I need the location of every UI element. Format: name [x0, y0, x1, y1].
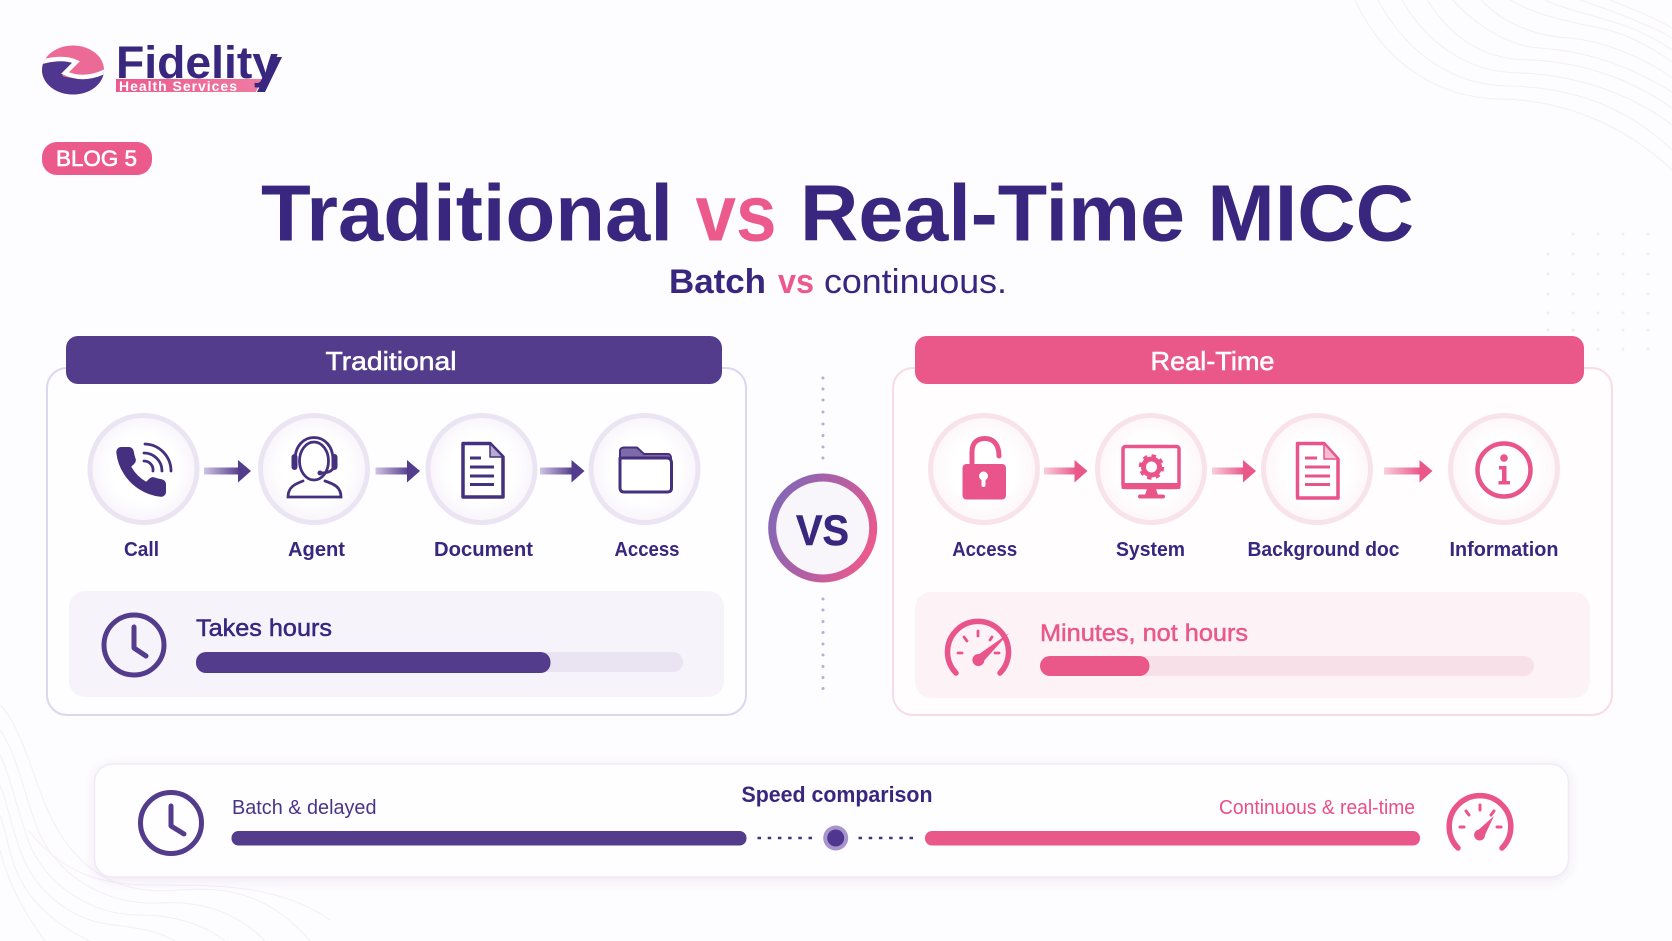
arrow: [376, 460, 420, 482]
duration card: takes hours: [69, 591, 724, 697]
title: vs: [696, 168, 776, 258]
panel: traditional: [47, 336, 746, 715]
logo wordmark: Fidelity: [116, 37, 278, 88]
step: agent: [260, 416, 368, 561]
arrow: [204, 460, 251, 482]
panel header: real-time: Real-Time: [1150, 346, 1274, 376]
title: [261, 168, 1414, 258]
panel header: traditional: Traditional: [326, 346, 456, 376]
step: call: Call: [124, 539, 159, 561]
title: Real-Time MICC: [800, 168, 1414, 258]
dotted line: bottom: [822, 598, 824, 690]
step: information: Information: [1450, 539, 1558, 561]
subtitle: Batch: [669, 263, 766, 301]
icon: clock: [140, 792, 202, 854]
step: document: Document: [434, 539, 533, 561]
logo: [42, 45, 282, 94]
logo tagline: Health Services: [119, 78, 237, 94]
icon: clock: [104, 615, 164, 675]
step: call: [90, 416, 197, 561]
arrow: [1044, 460, 1088, 482]
connector dots and node: [758, 826, 916, 850]
duration card: minutes not hours: [915, 592, 1590, 698]
step: background doc: [1248, 416, 1400, 561]
step: access lock: Access: [952, 539, 1017, 561]
panel: speed comparison: [94, 764, 1568, 877]
background waves: top right: [1355, 0, 1672, 170]
logo mark: [42, 46, 104, 94]
progress bar: [1040, 656, 1534, 676]
label: batch and delayed: Batch & delayed: [232, 797, 376, 819]
step: access folder: [591, 416, 698, 561]
vs badge: VS: [796, 507, 849, 555]
badge: blog 5: BLOG 5: [56, 146, 137, 171]
background waves: bottom left: [0, 705, 330, 941]
panel header: traditional: [66, 336, 722, 384]
subtitle: vs: [778, 263, 814, 301]
step: access lock: [930, 416, 1038, 561]
vs divider: [772, 376, 873, 690]
bar: real-time: [925, 831, 1420, 846]
badge: blog 5: [42, 142, 152, 175]
dotted line: top: [822, 376, 824, 460]
progress bar: [196, 652, 683, 673]
icon: speedometer: [1449, 796, 1511, 848]
subtitle: continuous.: [824, 263, 1007, 301]
subtitle: [669, 263, 1007, 301]
panel header: real-time: [915, 336, 1584, 384]
step: system: System: [1116, 539, 1185, 561]
background dots: [1546, 232, 1650, 350]
step: system: [1098, 416, 1204, 561]
step: access folder: Access: [614, 539, 680, 561]
arrow: [1384, 460, 1432, 482]
icon: speedometer: [948, 621, 1009, 673]
logo ribbon: [116, 79, 262, 92]
label: takes hours: Takes hours: [196, 615, 332, 642]
logo y tail: [257, 57, 282, 92]
step: background doc: Background doc: [1248, 539, 1400, 561]
step: document: [428, 416, 535, 561]
step: information: [1450, 416, 1558, 561]
step: agent: Agent: [288, 539, 345, 561]
vs badge: [772, 478, 873, 578]
label: continuous and real-time: Continuous & real-time: [1219, 797, 1415, 819]
arrow: [540, 460, 584, 482]
panel: real-time: [893, 336, 1612, 715]
heading: speed comparison: Speed comparison: [742, 782, 932, 807]
arrow: [1212, 460, 1256, 482]
bar: batch: [232, 831, 746, 846]
label: minutes not hours: Minutes, not hours: [1040, 620, 1248, 647]
title: Traditional: [261, 168, 673, 258]
